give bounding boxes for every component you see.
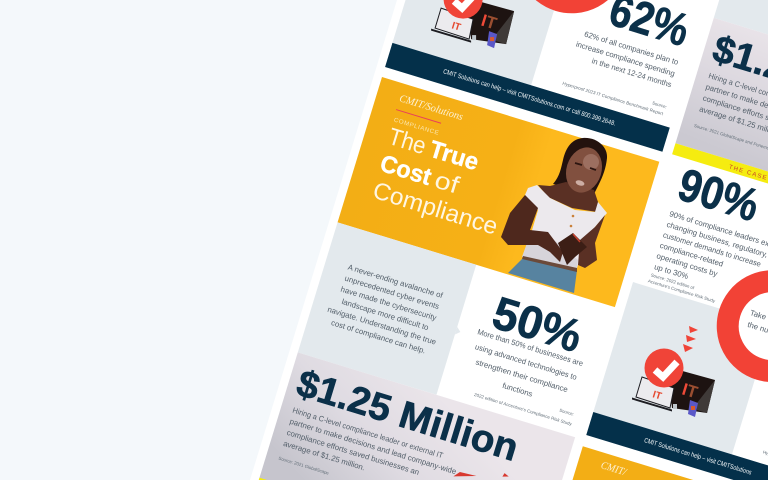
- white sheet background: [250, 0, 768, 480]
- panel: intro text: cost of compliance can help.: [330, 318, 427, 355]
- dark tablet: [467, 0, 514, 44]
- panel: 90% statistic: [647, 157, 768, 319]
- navy call-to-action band: [586, 412, 768, 480]
- shirt buttons: [570, 215, 574, 227]
- white laptop: [636, 377, 674, 408]
- panel: right column CTA tile: [586, 282, 768, 480]
- red object in photo: [453, 459, 509, 480]
- wallet red lining: [573, 234, 580, 242]
- panel: intro text: A never-ending avalanche of: [347, 263, 445, 300]
- face: [561, 143, 607, 197]
- panel: $1.25 million photo (left column): average of $1.25 million.: [282, 439, 366, 472]
- title: of: [431, 167, 463, 200]
- title: [369, 123, 517, 241]
- panel: next yellow hero tile: CMIT/: [599, 460, 628, 479]
- icon: devices and check (right column): IT: [651, 389, 663, 402]
- panel: 62% statistic: increase compliance spending: [575, 40, 676, 78]
- panel: 62% statistic: in the next 12-24 months: [591, 56, 673, 89]
- icon: devices and check (left column): IT: [450, 20, 462, 34]
- panel: 50% statistic: using advanced technologies to: [474, 342, 579, 382]
- panel: $1.25 million photo (left column): Source: 2021 GlobalScape: [278, 456, 330, 476]
- panel: 50% statistic: Source:: [559, 408, 575, 417]
- panel: $1.25 million photo (left column): [259, 352, 575, 480]
- panel: 50% statistic: 50%: [487, 286, 588, 362]
- panel: 62% statistic: [562, 0, 697, 117]
- title: Compliance: [370, 177, 501, 241]
- cheek highlight: [583, 154, 599, 170]
- panel: intro text: [298, 222, 481, 396]
- ring: left column callout: [516, 0, 628, 13]
- panel: next yellow hero tile: [572, 446, 694, 480]
- dark tablet: [668, 367, 715, 413]
- panel: 62% statistic: Source:: [652, 100, 668, 109]
- check badge: [444, 0, 483, 19]
- panel: $1.25 million photo (right column): [672, 0, 768, 239]
- neck and chest: [538, 182, 598, 212]
- belt: [522, 256, 577, 272]
- panel: 50% statistic: 2022 edition of Accenture's Compliance Risk Study: [474, 392, 573, 427]
- rotated infographic sheet: [259, 0, 768, 480]
- title: True: [426, 136, 482, 176]
- panel: intro text: have made the cybersecurity: [340, 285, 438, 322]
- panel: 90% statistic: operating costs by: [655, 251, 719, 278]
- ring: right column callout: [717, 270, 768, 382]
- panel: $1.25 million photo (left column): partner to make decisions and lead company-wide: [289, 417, 457, 476]
- mouth: [575, 179, 585, 187]
- photo: woman with empty wallet: [501, 138, 607, 293]
- panel: 50% statistic: strengthen their compliance: [474, 358, 569, 394]
- lower shirt shading: [522, 235, 578, 268]
- title: The: [385, 123, 429, 160]
- panel: 50% statistic: functions: [501, 381, 534, 399]
- right arm: [578, 215, 605, 268]
- panel: 62% statistic: Hyperproof 2023 IT Compliance Benchmark Report: [562, 81, 665, 116]
- wallet: [558, 233, 587, 265]
- panel: intro text: landscape more difficult to: [341, 297, 430, 332]
- white laptop: [435, 8, 473, 39]
- eyes: [575, 163, 596, 170]
- panel: 90% statistic: Source: 2022 edition of: [650, 272, 696, 291]
- title: Cost: [377, 150, 435, 191]
- panel: 62% statistic: 62% of all companies plan to: [583, 30, 680, 67]
- panel: $1.25 million photo (left column): Hiring a C-level compliance leader or external IT: [291, 406, 444, 460]
- CMIT Solutions logo: CMIT/Solutions: [398, 93, 464, 123]
- hair: [553, 138, 607, 196]
- small device: [673, 404, 677, 409]
- jeans: [508, 258, 577, 293]
- phone: [487, 31, 497, 48]
- panel: yellow hero: [338, 77, 659, 307]
- panel: 50% statistic: More than 50% of businesses are: [476, 327, 584, 368]
- left arm: [501, 195, 563, 262]
- navy call-to-action band: CMIT Solutions can help – visit CMITSolutions.com or call 800.399.2648.: [442, 68, 617, 128]
- navy call-to-action band: [385, 43, 670, 152]
- icon: devices and check (right column): [632, 326, 715, 417]
- panel: $1.25 million photo (left column): compliance efforts saved businesses an: [286, 428, 420, 477]
- panel: 90% statistic: up to 30%: [653, 262, 689, 281]
- compliance label: COMPLIANCE: [393, 117, 440, 137]
- top: [522, 185, 607, 268]
- icon: devices and check (left column): [431, 0, 514, 48]
- check badge: [644, 348, 684, 388]
- panel: left column CTA tile: [385, 0, 747, 152]
- panel: intro text: unprecedented cyber events: [344, 274, 440, 311]
- small device: [472, 35, 476, 40]
- panel: 50% statistic: [459, 283, 605, 427]
- arrowheads: [683, 326, 698, 352]
- panel: 90% statistic: Accenture's Compliance Risk Study: [647, 278, 717, 304]
- panel: $1.25 million photo (left column): $1.25 Million: [292, 363, 523, 470]
- panel: 90% statistic: customer demands to increase: [662, 230, 762, 269]
- panel: intro text: navigate. Understanding the true: [326, 305, 437, 347]
- phone: [688, 400, 698, 417]
- icon: devices and check (left column): IT: [479, 11, 500, 34]
- icon: devices and check (right column): IT: [680, 380, 700, 402]
- panel: 90% statistic: compliance-related: [659, 241, 724, 269]
